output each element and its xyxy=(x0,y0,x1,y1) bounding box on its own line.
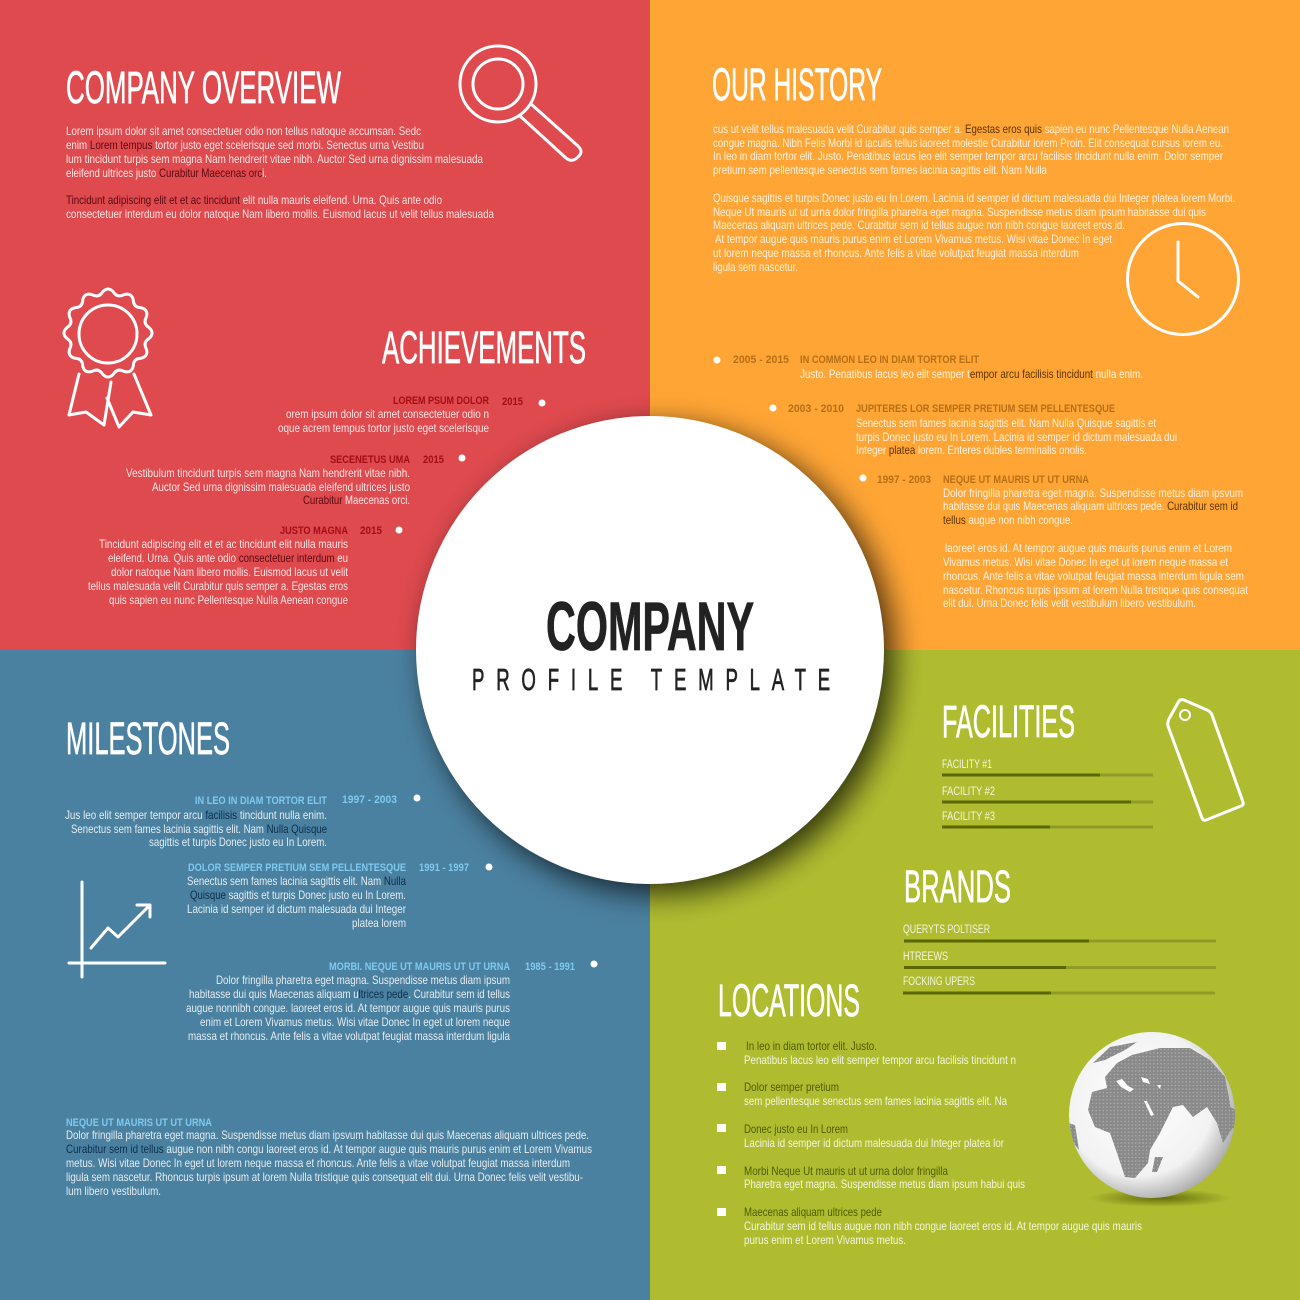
location item 4: Pharetra eget magna. Suspendisse metus diam ipsum habui quis xyxy=(744,1177,1025,1191)
location item 1: In leo in diam tortor elit. Justo. xyxy=(746,1039,877,1053)
section: locations xyxy=(717,975,1236,1247)
milestone item 1: 1997 - 2003 xyxy=(342,794,397,806)
achievement item 1 xyxy=(278,395,546,435)
icon: magnifying glass xyxy=(460,46,581,160)
panel: red top-left quadrant xyxy=(0,0,650,650)
location item 4 xyxy=(717,1164,1025,1191)
location item 2: sem pellentesque senectus sem fames lacinia sagittis elit. Na xyxy=(744,1094,1007,1108)
achievement item 3: Tincidunt adipiscing elit et et ac tincidunt elit nulla mauris xyxy=(99,537,348,551)
text block: history body xyxy=(713,122,1235,274)
milestone item 4 xyxy=(66,1117,592,1198)
achievement item 3: 2015 xyxy=(360,525,382,537)
icon: clock xyxy=(1128,224,1238,334)
history paragraph: laoreet eros id. At tempor augue quis mauris purus enim et Lorem xyxy=(945,541,1232,555)
bar: facility 1 xyxy=(942,759,1153,776)
milestone item 3: Dolor fringilla pharetra eget magna. Suspendisse metus diam ipsum xyxy=(216,973,510,987)
history item 1 xyxy=(714,354,1143,381)
history paragraph: Vivamus metus. Wisi vitae Donec In eget ut lorem neque massa et xyxy=(943,555,1229,569)
achievement item 2: 2015 xyxy=(423,454,444,466)
achievement item 2: Auctor Sed urna dignissim malesuada eleifend ultrices justo xyxy=(152,480,410,494)
text block: overview body: Lorem ipsum dolor sit amet consectetuer odio non tellus natoque accumsan. Sedc xyxy=(66,124,421,138)
text block: overview body: consectetuer interdum eu dolor natoque Nam libero mollis. Euismod lacus ut velit tellus malesuada xyxy=(66,207,494,221)
bar: facility 2: FACILITY #2 xyxy=(942,786,995,798)
achievement item 1: 2015 xyxy=(502,396,523,408)
achievement item 2: Curabitur Maecenas orci. xyxy=(303,493,410,507)
location item 1: Penatibus lacus leo elit semper tempor arcu facilisis tincidunt n xyxy=(744,1053,1016,1067)
heading: locations: LOCATIONS xyxy=(718,975,860,1026)
history item 1: 2005 - 2015 xyxy=(733,354,789,366)
location item 1 xyxy=(717,1039,1016,1067)
icon: price tag xyxy=(1168,700,1243,820)
bar: brand 2: HTREEWS xyxy=(903,951,948,963)
history item 1: Justo. Penatibus lacus leo elit semper tempor arcu facilisis tincidunt nulla enim. xyxy=(800,367,1143,381)
section: achievements xyxy=(64,289,586,607)
heading: company overview: COMPANY OVERVIEW xyxy=(66,62,341,113)
achievement item 3 xyxy=(88,525,402,607)
milestone item 1: Jus leo elit semper tempor arcu facilisis tincidunt nulla enim. xyxy=(65,808,327,822)
section: brands xyxy=(903,861,1216,994)
milestone item 4: Curabitur sem id tellus augue non nibh congu laoreet eros id. At tempor augue quis mauris purus enim et Lorem Vivamus xyxy=(66,1142,592,1156)
history item 2: turpis Donec justo eu In Lorem. Lacinia id semper id dictum malesuada dui xyxy=(856,430,1177,444)
milestone item 2: Quisque sagittis et turpis Donec justo eu In Lorem. xyxy=(190,888,406,902)
bar: facility 2 xyxy=(942,786,1153,804)
achievement item 1: orem ipsum dolor sit amet consectetuer odio n xyxy=(286,407,489,421)
text block: overview body: lum tincidunt turpis sem magna Nam hendrerit vitae nibh. Auctor Sed urna dignissim malesuada xyxy=(66,152,483,166)
timeline: history xyxy=(714,354,1249,610)
location item 5: purus enim et Lorem Vivamus metus. xyxy=(744,1233,906,1247)
panel: blue bottom-left quadrant xyxy=(0,650,650,1300)
text block: history body: Maecenas aliquam ultrices pede. Curabitur sem id tellus augue non nibh congue laoreet eros id. xyxy=(713,218,1125,232)
milestone item 2: Senectus sem fames lacinia sagittis elit. Nam Nulla xyxy=(187,874,406,888)
text block: history body: pretium sem pellentesque senectus sem fames lacinia sagittis elit. Nam Nulla xyxy=(713,163,1047,177)
history item 2: 2003 - 2010 xyxy=(788,403,844,415)
history item 2: JUPITERES LOR SEMPER PRETIUM SEM PELLENTESQUE xyxy=(856,403,1115,415)
achievement item 2 xyxy=(126,454,466,507)
heading: brands: BRANDS xyxy=(904,861,1011,912)
achievement item 3: dolor natoque Nam libero mollis. Euismod lacus ut velit xyxy=(111,565,349,579)
achievement item 3: quis sapien eu nunc Pellentesque Nulla Aenean congue xyxy=(109,593,348,607)
milestone item 2: DOLOR SEMPER PRETIUM SEM PELLENTESQUE xyxy=(188,862,406,874)
history item 3: NEQUE UT MAURIS UT UT URNA xyxy=(943,474,1089,486)
heading: facilities: FACILITIES xyxy=(942,696,1075,747)
milestone item 1: IN LEO IN DIAM TORTOR ELIT xyxy=(195,795,327,807)
text block: overview body: eleifend ultrices justo Curabitur Maecenas orci. xyxy=(66,166,267,180)
location item 5: Maecenas aliquam ultrices pede xyxy=(744,1205,882,1219)
location item 3 xyxy=(717,1122,1004,1150)
bar: facility 3 xyxy=(942,811,1153,828)
icon: growth chart xyxy=(69,882,165,977)
bar: brand 2 xyxy=(903,951,1216,969)
milestone item 1 xyxy=(65,794,420,849)
history paragraph: rhoncus. Ante felis a vitae volutpat feugiat massa interdum ligula sem xyxy=(943,569,1244,583)
text block: overview body xyxy=(66,124,494,221)
achievement item 3: tellus malesuada velit Curabitur quis semper a. Egestas eros xyxy=(88,579,348,593)
panel: orange top-right quadrant xyxy=(650,0,1300,650)
heading: our history: OUR HISTORY xyxy=(712,59,882,110)
title: company: COMPANY xyxy=(546,588,754,665)
location item 3: Donec justo eu In Lorem xyxy=(744,1122,848,1136)
history paragraph: elit dui. Urna Donec felis velit vestibulum libero vestibulum. xyxy=(943,596,1196,610)
location item 2 xyxy=(717,1080,1007,1108)
text block: overview body: enim Lorem tempus tortor justo eget scelerisque sed morbi. Senectus urna Vestibu xyxy=(66,138,424,152)
text block: overview body: Tincidunt adipiscing elit et et ac tincidunt elit nulla mauris eleifend. Urna. Quis ante odio xyxy=(66,193,442,207)
milestone item 2: platea lorem xyxy=(352,916,406,930)
milestone item 4: metus. Wisi vitae Donec In eget ut lorem neque massa et rhoncus. Ante felis a vitae volutpat feugiat massa interdum xyxy=(66,1156,570,1170)
achievement item 2: Vestibulum tincidunt turpis sem magna Nam hendrerit vitae nibh. xyxy=(126,466,410,480)
bar: brand 1: QUERYTS POLTISER xyxy=(903,924,990,936)
bar: brand 3: FOCKING UPERS xyxy=(903,976,975,988)
history item 3: Dolor fringilla pharetra eget magna. Suspendisse metus diam ipsvum xyxy=(943,486,1243,500)
milestone item 4: ligula sem nascetur. Rhoncus turpis ipsum at lorem Nulla tristique quis consequat elit dui. Urna Donec felis velit vestibu- xyxy=(66,1170,583,1184)
milestone item 4: Dolor fringilla pharetra eget magna. Suspendisse metus diam ipsvum habitasse dui quis Maecenas aliquam ultrices pede. xyxy=(66,1128,589,1142)
milestone item 3 xyxy=(186,960,598,1043)
history item 2: Integer platea lorem. Enteres dubles terminalis onolis. xyxy=(856,443,1087,457)
panel: green bottom-right quadrant xyxy=(650,650,1300,1300)
location item 5: Curabitur sem id tellus augue non nibh congue laoreet eros id. At tempor augue quis mauris xyxy=(744,1219,1142,1233)
text block: history body: ligula sem nascetur. xyxy=(713,260,798,274)
milestone item 3: 1985 - 1991 xyxy=(525,961,575,973)
bar: facility 3: FACILITY #3 xyxy=(942,811,995,823)
section: our history xyxy=(712,59,1238,334)
history item 3: tellus augue non nibh congue. xyxy=(943,513,1073,527)
icon: dotted globe xyxy=(1068,1032,1236,1207)
milestone item 3: enim et Lorem Vivamus metus. Wisi vitae Donec In eget ut lorem neque xyxy=(200,1015,510,1029)
history item 3: 1997 - 2003 xyxy=(877,474,931,486)
subtitle: profile template: PROFILE TEMPLATE xyxy=(472,663,830,697)
milestone item 3: augue nonnibh congue. laoreet eros id. At tempor augue quis mauris purus xyxy=(186,1001,510,1015)
location item 2: Dolor semper pretium xyxy=(744,1080,839,1094)
history item 2 xyxy=(770,403,1177,457)
bar: facility 1: FACILITY #1 xyxy=(942,759,992,771)
heading: achievements: ACHIEVEMENTS xyxy=(382,322,586,373)
text block: history body: ut lorem neque massa et rhoncus. Ante felis a vitae volutpat feugiat massa interdum xyxy=(713,246,1079,260)
milestone item 2 xyxy=(187,862,492,930)
icon: award rosette xyxy=(64,289,152,427)
location item 3: Lacinia id semper id dictum malesuada dui Integer platea lor xyxy=(744,1136,1004,1150)
section: company overview xyxy=(66,46,581,221)
achievement item 2: SECENETUS UMA xyxy=(330,454,410,466)
text block: history body: At tempor augue quis mauris purus enim et Lorem Vivamus metus. Wisi vitae Donec In eget xyxy=(715,232,1113,246)
achievement item 1: oque acrem tempus tortor justo eget scelerisque xyxy=(278,421,489,435)
section: facilities xyxy=(942,696,1243,828)
milestone item 4: lum libero vestibulum. xyxy=(66,1184,161,1198)
achievement item 3: JUSTO MAGNA xyxy=(280,525,348,537)
achievement item 1: LOREM PSUM DOLOR xyxy=(393,395,489,407)
location item 4: Morbi Neque Ut mauris ut ut urna dolor fringilla xyxy=(744,1164,948,1178)
milestone item 1: Senectus sem fames lacinia sagittis elit. Nam Nulla Quisque xyxy=(71,822,327,836)
history item 1: IN COMMON LEO IN DIAM TORTOR ELIT xyxy=(800,354,979,366)
location item 5 xyxy=(717,1205,1142,1247)
history item 2: Senectus sem fames lacinia sagittis elit. Nam Nulla Quisque sagittis et xyxy=(856,416,1157,430)
text block: history body: cus ut velit tellus malesuada velit Curabitur quis semper a. Egestas eros quis sapien eu nunc Pellentesque Nulla Aenean xyxy=(713,122,1229,136)
milestone item 1: sagittis et turpis Donec justo eu In Lorem. xyxy=(149,835,327,849)
bar: brand 3 xyxy=(903,976,1215,994)
milestone item 3: massa et rhoncus. Ante felis a vitae volutpat feugiat massa interdum ligula xyxy=(188,1029,510,1043)
milestone item 2: Lacinia id semper id dictum malesuada dui Integer xyxy=(187,902,406,916)
milestone item 4: NEQUE UT MAURIS UT UT URNA xyxy=(66,1117,212,1129)
history item 3: habitasse dui quis Maecenas aliquam ultrices pede. Curabitur sem id xyxy=(943,499,1238,513)
achievement item 3: eleifend. Urna. Quis ante odio consectetuer interdum eu xyxy=(108,551,348,565)
bar: brand 1 xyxy=(903,924,1216,942)
milestone item 3: habitasse dui quis Maecenas aliquam ultrices pede. Curabitur sem id tellus xyxy=(189,987,510,1001)
history paragraph xyxy=(943,541,1249,610)
heading: milestones: MILESTONES xyxy=(66,713,230,764)
milestone item 3: MORBI. NEQUE UT MAURIS UT UT URNA xyxy=(329,961,510,973)
center circle with title xyxy=(416,416,894,894)
milestone item 2: 1991 - 1997 xyxy=(419,862,469,874)
history item 3 xyxy=(860,474,1243,527)
